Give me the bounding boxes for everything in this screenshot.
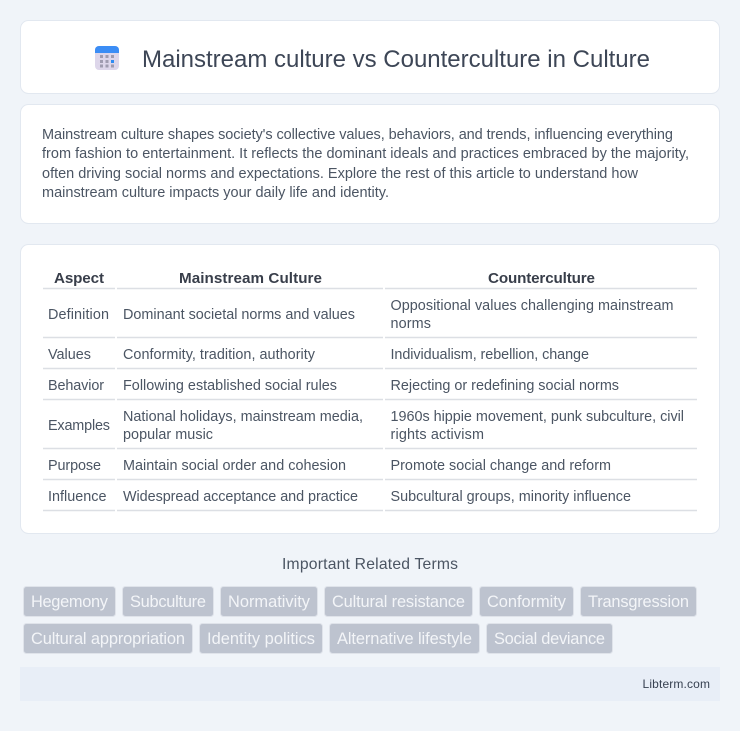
chip: Subculture: Subculture bbox=[130, 593, 206, 611]
row: Behavior: Rejecting or redefining social norms bbox=[390, 378, 619, 394]
row: Definition bbox=[48, 298, 674, 332]
table header: Mainstream Culture bbox=[179, 270, 322, 287]
row: Examples: Examples bbox=[48, 418, 110, 434]
row: Influence: Influence bbox=[48, 489, 106, 505]
row: Values: Conformity, tradition, authority bbox=[123, 347, 316, 363]
panel: introduction bbox=[20, 104, 720, 224]
chip: Normativity: Normativity bbox=[228, 593, 311, 611]
row: Behavior: Following established social rules bbox=[123, 378, 337, 394]
row: Definition: norms bbox=[390, 316, 431, 332]
chip: Cultural appropriation: Cultural appropriation bbox=[31, 630, 185, 648]
row: Values: Individualism, rebellion, change bbox=[390, 347, 589, 363]
chip: Normativity bbox=[220, 586, 318, 616]
chip: Alternative lifestyle: Alternative lifestyle bbox=[337, 630, 472, 648]
chip: Alternative lifestyle bbox=[330, 624, 480, 654]
chip: Hegemony: Hegemony bbox=[31, 593, 109, 611]
chip: Cultural resistance bbox=[324, 586, 472, 616]
chip: Transgression: Transgression bbox=[588, 593, 689, 611]
chip: Identity politics bbox=[200, 624, 322, 654]
chip: Hegemony bbox=[24, 586, 116, 616]
row: Definition: Dominant societal norms and values bbox=[123, 307, 355, 323]
row: Examples: 1960s hippie movement, punk subculture, civil bbox=[390, 409, 684, 425]
chip: Identity politics: Identity politics bbox=[207, 630, 315, 648]
intro text: from fashion to entertainment. It reflects the dominant ideals and practices embraced by the majority, bbox=[42, 146, 689, 162]
intro text: Mainstream culture shapes society's collective values, behaviors, and trends, influencing everything bbox=[42, 127, 673, 143]
chip: Conformity: Conformity bbox=[487, 593, 567, 611]
table header: Aspect bbox=[54, 270, 104, 287]
related terms chips bbox=[24, 586, 696, 654]
row: Definition: Definition bbox=[48, 307, 109, 323]
related terms heading: Important Related Terms bbox=[282, 556, 458, 573]
row: Purpose: Maintain social order and cohesion bbox=[123, 458, 346, 474]
icon: calendar bbox=[95, 46, 119, 70]
row: Purpose: Purpose bbox=[48, 458, 101, 474]
footer bbox=[20, 667, 720, 701]
row: Behavior: Behavior bbox=[48, 378, 104, 394]
row: Influence: Subcultural groups, minority influence bbox=[390, 489, 631, 505]
intro text: often driving social norms and expectations. Explore the rest of this article to understand how bbox=[42, 166, 639, 182]
row: Purpose bbox=[48, 458, 611, 474]
row: Influence: Widespread acceptance and practice bbox=[123, 489, 358, 505]
intro text bbox=[42, 127, 689, 201]
intro text: mainstream culture impacts your daily life and identity. bbox=[42, 185, 389, 201]
panel: comparison table bbox=[20, 244, 720, 534]
chip: Transgression bbox=[580, 586, 696, 616]
row: Examples: National holidays, mainstream media, bbox=[123, 409, 363, 425]
row: Purpose: Promote social change and reform bbox=[390, 458, 611, 474]
chip: Conformity bbox=[480, 586, 574, 616]
table header bbox=[54, 270, 595, 287]
chip: Cultural resistance: Cultural resistance bbox=[332, 593, 465, 611]
footer source text: Libterm.com bbox=[642, 677, 710, 691]
table header: Counterculture bbox=[488, 270, 595, 287]
row: Behavior bbox=[48, 378, 619, 394]
row: Examples: popular music bbox=[123, 427, 213, 443]
title: Mainstream culture vs Counterculture in Culture bbox=[142, 46, 650, 73]
row: Examples: rights activism bbox=[390, 427, 484, 443]
row: Definition: Oppositional values challenging mainstream bbox=[390, 298, 674, 314]
row: Values bbox=[48, 347, 589, 363]
chip: Cultural appropriation bbox=[24, 624, 192, 654]
chip: Social deviance bbox=[486, 624, 612, 654]
header panel bbox=[20, 20, 720, 94]
row: Influence bbox=[48, 489, 631, 505]
row: Values: Values bbox=[48, 347, 91, 363]
chip: Social deviance: Social deviance bbox=[494, 630, 605, 648]
row: Examples bbox=[48, 409, 684, 443]
chip: Subculture bbox=[122, 586, 214, 616]
